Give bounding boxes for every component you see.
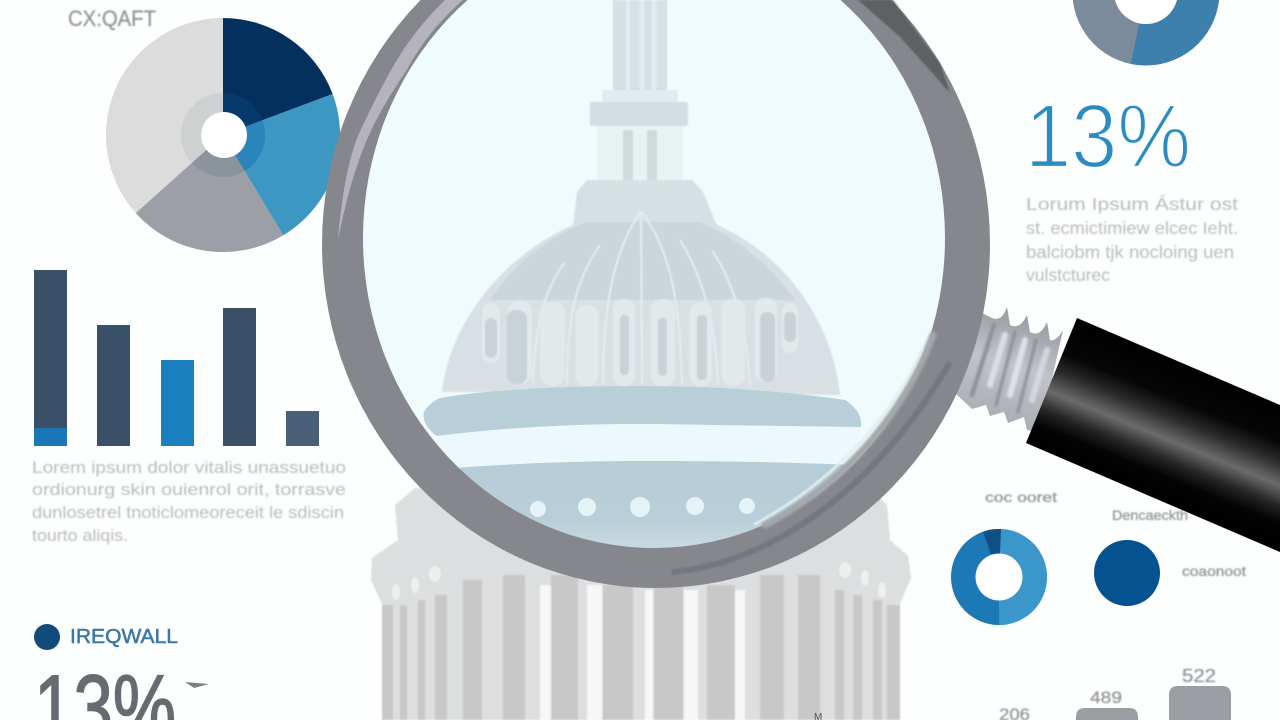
solid circle side label: coaonoot (1182, 563, 1246, 579)
right paragraph: vulstcturec (1026, 265, 1110, 285)
magnifier handle neck (955, 307, 1063, 432)
pie chart (106, 18, 340, 252)
left paragraph (32, 459, 346, 545)
dome upper band (424, 386, 861, 436)
lens with capitol dome (363, 0, 945, 548)
dome white band (438, 424, 855, 436)
magnifier ring (322, 0, 990, 588)
ring lower shadow (672, 362, 950, 572)
top-left label: CX:QAFT (68, 6, 156, 31)
top-right donut (1072, 0, 1220, 66)
right paragraph: balciobm tjk nocloing uen (1026, 242, 1234, 262)
dome windows row (530, 497, 755, 517)
ring top-right shadow (858, 0, 950, 93)
solid circle label: Dencaeckth (1112, 507, 1188, 523)
small dash mark (185, 682, 209, 688)
lens glass (363, 0, 945, 468)
capitol base with columns (371, 488, 911, 720)
small donut (951, 529, 1047, 625)
solid blue circle (1094, 540, 1160, 606)
bar value 522: 522 (1182, 666, 1216, 686)
right paragraph: Lorum Ipsum Ástur ost (1026, 194, 1238, 214)
ring left highlight (338, 0, 463, 240)
bar chart (34, 270, 319, 446)
left paragraph: tourto aliqis. (32, 527, 128, 545)
ring rim bright edge (755, 350, 922, 524)
legend bullet (34, 624, 60, 650)
bar value 489: 489 (1090, 688, 1122, 707)
right statistic: 13% (1025, 87, 1191, 187)
magnifier handle (1026, 318, 1280, 552)
dome (442, 212, 840, 395)
ring inner rim highlight (765, 335, 933, 525)
bottom-right bars (1076, 686, 1231, 720)
legend heading: IREQWALL (70, 626, 178, 648)
dome lower band (458, 461, 852, 548)
left paragraph: dunlosetrel tnoticlomeoreceit le sdiscin (32, 504, 344, 522)
left paragraph: Lorem ipsum dolor vitalis unassuetuo (32, 459, 346, 477)
small donut label: coc ooret (985, 489, 1057, 505)
right paragraph (1026, 194, 1238, 285)
left paragraph: ordionurg skin ouienrol orit, torrasve (32, 481, 346, 499)
right paragraph: st. ecmictimiew elcec Ieht. (1026, 218, 1238, 238)
lantern tower (573, 0, 717, 226)
